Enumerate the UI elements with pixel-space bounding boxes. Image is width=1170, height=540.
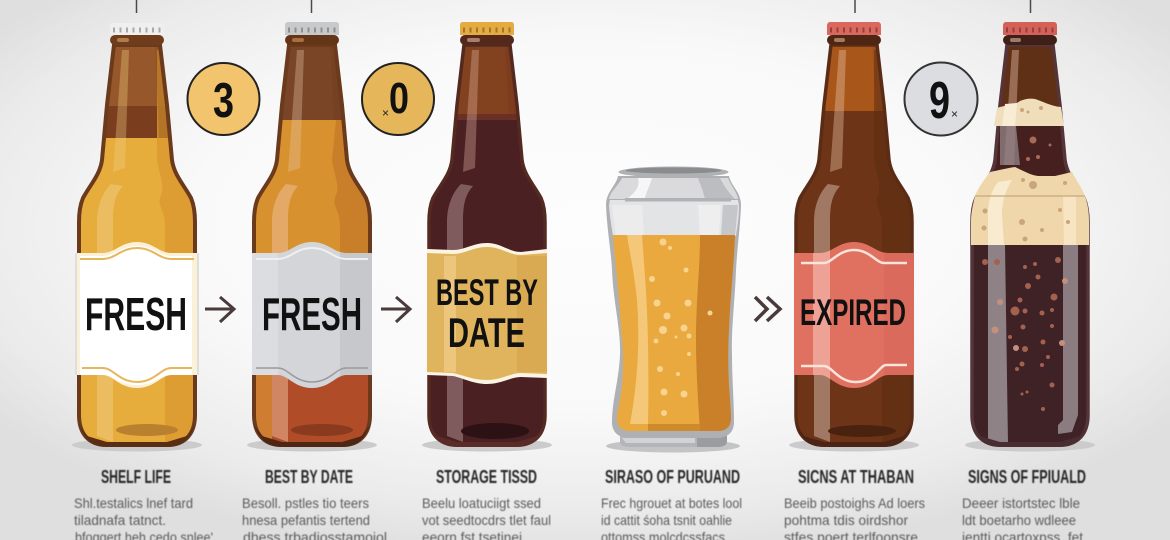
captions and descriptions column 2: [242, 467, 387, 540]
badge: 0: [362, 63, 434, 135]
captions and descriptions column 6: SIGNS OF FPIUALD: [968, 467, 1086, 487]
captions and descriptions column 4: Frec hgrouet at botes lool: [601, 495, 742, 511]
beer glass: [606, 166, 741, 452]
lower foam band: [971, 167, 1089, 245]
bottle 3: best by date: [417, 22, 557, 452]
top tick marks: [136, 0, 1030, 13]
beer in glass: [613, 235, 735, 431]
captions and descriptions column 3: [422, 467, 551, 540]
bottle 3 label text: [436, 272, 538, 356]
captions and descriptions column 5: pohtma tdis oirdshor: [784, 512, 908, 528]
captions and descriptions column 1: SHELF LIFE: [101, 467, 171, 487]
captions and descriptions column 2: Besoll. pstles tio teers: [242, 495, 369, 511]
bottle 5: expired: [789, 22, 919, 452]
captions and descriptions column 1: tiladnafa tatnct.: [74, 512, 166, 528]
captions and descriptions column 5: [784, 467, 925, 540]
bottle 6: spoiled: [960, 22, 1100, 452]
captions and descriptions column 4: id cattit śoha tsnit oahlie: [601, 512, 732, 528]
badge: 3: 3: [213, 74, 234, 128]
bottle 2: fresh: [242, 22, 382, 452]
badge: 9: ×: [951, 107, 958, 121]
double chevron arrow: [755, 297, 780, 321]
bottle 1 label text: FRESH: [85, 288, 187, 340]
captions and descriptions column 3: STORAGE TISSD: [436, 467, 537, 487]
bubbles: [649, 238, 712, 416]
glass base: [620, 432, 727, 447]
captions and descriptions column 5: Beeib postoighs Ad loers: [784, 495, 925, 511]
badge: 9: 9: [929, 72, 950, 130]
captions and descriptions column 6: [961, 467, 1086, 540]
arrow 1: [205, 297, 234, 322]
captions and descriptions column 1: [74, 467, 213, 540]
bottle 3 label text: DATE: [448, 309, 525, 356]
upper foam band: [994, 99, 1064, 126]
captions and descriptions column 2: hnesa pefantis tertend: [242, 512, 370, 528]
captions and descriptions column 3: vot seedtocdrs tlet faul: [422, 512, 551, 528]
badge: 9: [904, 62, 978, 136]
captions and descriptions column 4: [601, 467, 742, 540]
captions and descriptions column 2: BEST BY DATE: [265, 467, 353, 487]
badge: 3: [188, 63, 260, 135]
captions and descriptions column 4: SIRASO OF PURUAND: [605, 467, 740, 487]
captions and descriptions column 5: SICNS AT THABAN: [798, 467, 914, 487]
upper glass panels: [609, 200, 739, 236]
badge: 0: ×: [382, 106, 389, 120]
bottle 3 label text: BEST BY: [436, 272, 538, 313]
captions and descriptions column 1: Shl.testalics lnef tard: [74, 495, 193, 511]
arrow 2: [381, 297, 410, 322]
bottle 2 label text: FRESH: [262, 288, 362, 340]
glass outer body: [606, 176, 741, 438]
badge: 0: 0: [389, 74, 409, 123]
bottle 5 label text: EXPIRED: [800, 292, 906, 333]
captions and descriptions column 6: ldt boetarho wdleee: [962, 512, 1076, 528]
bottle 1: fresh: [72, 28, 202, 452]
captions and descriptions column 6: Deeer istortstec lble: [962, 495, 1080, 511]
captions and descriptions column 3: Beelu loatuciigt ssed: [422, 495, 541, 511]
